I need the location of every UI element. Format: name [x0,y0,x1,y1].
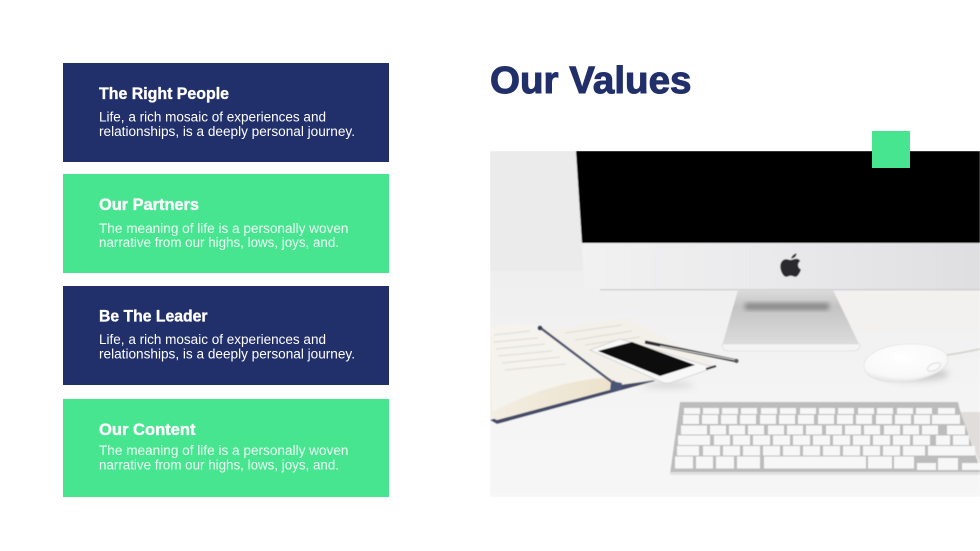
heading: Our Content: Our Content [99,420,196,439]
panel: Our Content [63,399,389,497]
text block: Our Content description: narrative from our highs, lows, joys, and. [99,457,339,472]
heading: The Right People: The Right People [99,84,229,103]
text block: Be The Leader description: relationships, is a deeply personal journey. [99,347,355,362]
icon: open book [490,318,713,424]
text block: Our Content description [99,443,348,472]
icon: apple logo [780,253,801,277]
panel: The Right People [63,63,389,162]
heading: Our Partners: Our Partners [99,195,199,214]
icon: smartphone [590,339,716,388]
text block: Our Partners description [99,221,348,250]
text block: The Right People description: Life, a rich mosaic of experiences and [99,110,326,125]
text block: Be The Leader description: Life, a rich mosaic of experiences and [99,332,326,347]
text block: The Right People description [99,110,355,139]
title: Our Values [490,60,692,102]
icon: keyboard [670,402,980,475]
green accent square [872,131,910,168]
icon: monitor [576,151,980,351]
heading: Be The Leader: Be The Leader [99,306,208,326]
panel: Our Partners [63,174,389,273]
panel: Be The Leader [63,286,389,385]
text block: Be The Leader description [99,332,355,362]
icon: mouse [864,344,980,382]
text block: Our Partners description: The meaning of life is a personally woven [99,221,348,236]
photo: desk with computer, book, phone, mouse and keyboard [490,151,980,497]
text block: Our Content description: The meaning of life is a personally woven [99,443,348,458]
text block: Our Partners description: narrative from our highs, lows, joys, and. [99,235,339,250]
icon: pen [645,342,739,363]
text block: The Right People description: relationships, is a deeply personal journey. [99,124,355,139]
